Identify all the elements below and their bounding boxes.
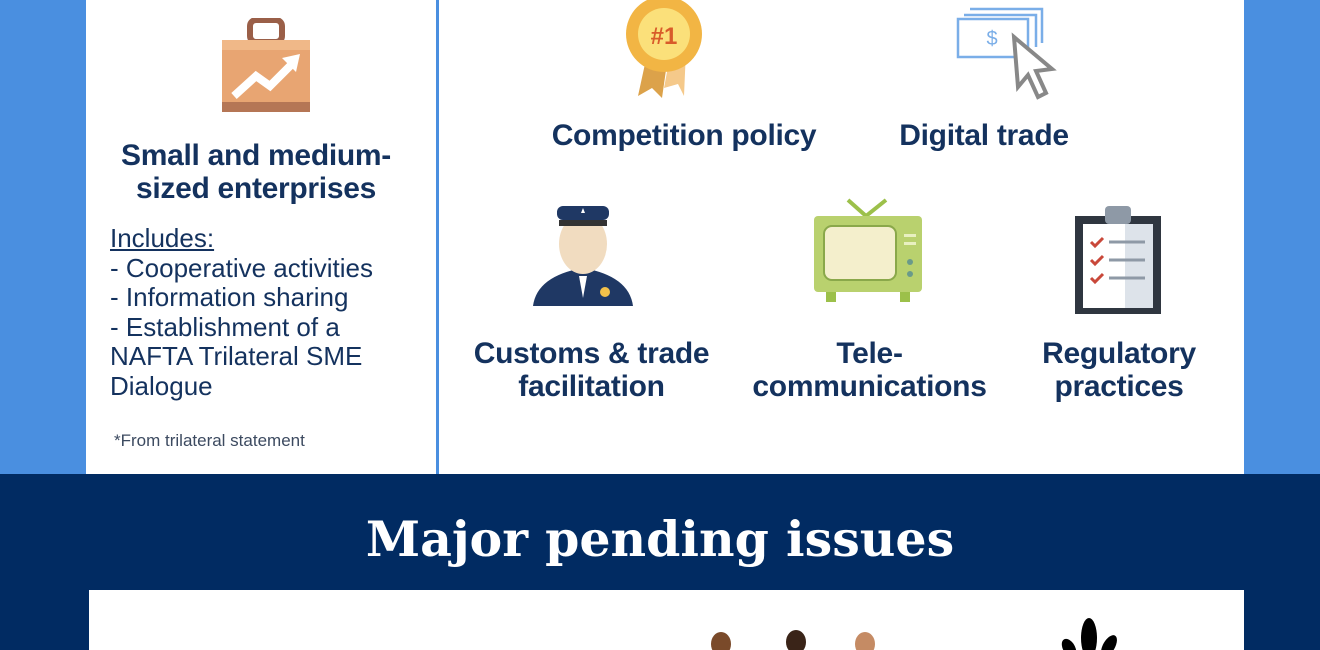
icon: people heads: [711, 630, 875, 650]
panel: topics: [439, 0, 1244, 474]
text block: includes list: - Information sharing: [110, 282, 348, 312]
heading: competition policy: Competition policy: [552, 119, 816, 152]
heading: regulatory: Regulatory: [1042, 337, 1196, 370]
heading: customs: facilitation: [518, 370, 665, 403]
heading: customs: Customs & trade: [474, 337, 709, 370]
heading: telecom: [752, 337, 987, 403]
heading: regulatory: [1042, 337, 1196, 403]
icon: television: [814, 198, 922, 302]
icon: digital money: [956, 8, 1057, 100]
icon: clipboard: [1075, 206, 1161, 314]
text block: includes list: - Cooperative activities: [110, 252, 373, 282]
heading: SME: sized enterprises: [136, 172, 376, 205]
icon: award ribbon: [626, 0, 702, 98]
heading: regulatory: practices: [1054, 370, 1184, 403]
text block: includes list: [110, 223, 373, 400]
icon: award ribbon: #1: [651, 23, 677, 50]
panel: pending issues content: [89, 590, 1244, 650]
icon: briefcase: [222, 18, 310, 112]
text block: includes list: - Establishment of a NAFTA Trilateral SME Dialogue: [110, 312, 362, 400]
panel: pending issues band: [0, 474, 1320, 650]
icon: black leaf: [1062, 618, 1117, 650]
heading: telecom: communications: [752, 370, 987, 403]
title: major pending issues: Major pending issues: [366, 510, 954, 568]
icon: customs officer: [533, 206, 633, 306]
heading: customs: [474, 337, 709, 403]
panel: SME: [86, 0, 436, 474]
heading: telecom: Tele-: [836, 337, 903, 370]
text block: includes list: Includes:: [110, 223, 214, 253]
heading: SME: [121, 139, 391, 205]
heading: SME: Small and medium-: [121, 139, 391, 172]
footnote: *From trilateral statement: [114, 431, 305, 450]
heading: digital trade: Digital trade: [899, 119, 1069, 152]
icon: digital money: $: [986, 28, 998, 50]
